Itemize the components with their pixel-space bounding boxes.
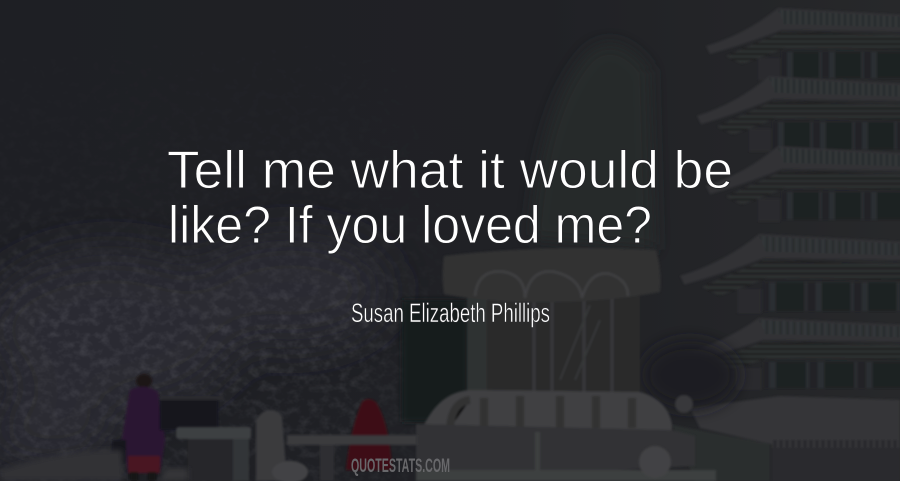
stone column monument xyxy=(416,248,716,481)
watermark: QUOTESTATS.COM xyxy=(351,456,450,477)
base plinth xyxy=(416,424,695,474)
visitor in red xyxy=(346,399,392,470)
lotus base xyxy=(424,390,672,434)
quote line 2: like? If you loved me? xyxy=(168,196,652,255)
stone balustrade xyxy=(176,410,417,481)
quote text xyxy=(167,141,733,255)
carved drum xyxy=(442,248,660,302)
altar table behind visitor xyxy=(160,396,224,430)
shrubs beside the column xyxy=(642,341,738,409)
snowy ground xyxy=(0,450,124,481)
pagoda tiers at right xyxy=(672,8,900,481)
quote line 1: Tell me what it would be xyxy=(167,141,733,200)
snowy trees at left xyxy=(0,235,390,470)
stone statue behind the quote xyxy=(530,43,655,250)
carved column xyxy=(467,296,640,396)
author name: Susan Elizabeth Phillips xyxy=(351,298,550,328)
snow-capped stone balls xyxy=(639,395,693,478)
tree texture xyxy=(0,243,398,474)
dark doorway beside the column xyxy=(402,300,468,422)
visitor in purple xyxy=(112,374,165,481)
